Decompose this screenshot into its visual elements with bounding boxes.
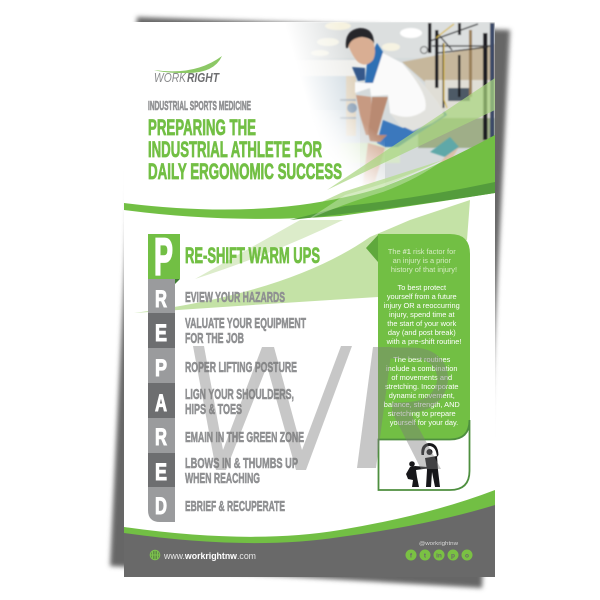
callout text: best routines: balance, strength, AND [384,400,460,409]
checklist text: ROPER LIFTING POSTURE [185,359,297,376]
social icons: f [410,552,413,560]
checklist text [185,243,320,515]
checklist text: WHEN REACHING [185,470,260,487]
callout text: protection advice: injury, spend time at [389,310,455,319]
logo: Work Right: RIGHT [187,71,220,85]
social icons: in [436,552,442,560]
person [344,27,459,184]
callout panel [366,234,470,490]
subtitle: INDUSTRIAL SPORTS MEDICINE [148,99,251,113]
watermark: W R [193,346,443,470]
callout text: protection advice: the start of your work [387,319,457,328]
callout text: risk factor: The #1 risk factor for [388,247,456,256]
checklist text: FOR THE JOB [185,330,244,347]
PREPARED letter column: R [155,424,167,451]
checklist text: RE-SHIFT WARM UPS [185,243,320,268]
checklist text: LBOWS IN & THUMBS UP [185,455,298,472]
PREPARED letter column: E [155,320,167,347]
pale green wedge [195,220,343,279]
callout text: best routines: of movements and [391,373,452,382]
green swoosh band [124,78,495,220]
callout text: best routines: dynamic movement, [389,391,455,400]
light green wedge [134,200,470,313]
PREPARED letter column: E [155,459,167,486]
footer band [124,490,495,577]
PREPARED letter column: D [155,493,167,520]
social icons: o [465,552,469,560]
callout text: best routines: stretching. Incorporate [385,382,459,391]
icon: globe [150,550,160,560]
icon: people stretching [406,443,440,487]
callout text: protection advice: injury OR a reoccurring [384,301,460,310]
photo: worker stretching in gym [298,22,495,186]
checklist text: LIGN YOUR SHOULDERS, [185,386,294,403]
logo: Work Right [154,56,222,82]
checklist text: EBRIEF & RECUPERATE [185,498,285,515]
checklist text: VALUATE YOUR EQUIPMENT [185,315,306,332]
PREPARED letter column [148,228,180,522]
callout text: protection advice: day (and post break) [388,328,456,337]
page drop shadow [110,17,510,588]
checklist text: EMAIN IN THE GREEN ZONE [185,429,304,446]
social icons: p [451,552,455,560]
checklist text: EVIEW YOUR HAZARDS [185,289,285,306]
checklist text: HIPS & TOES [185,401,242,418]
callout text: risk factor: an injury is a prior [393,256,451,265]
logo: Work Right: WORK [154,71,187,85]
title [148,119,342,180]
callout text: best routines: stretching to prepare [388,409,456,418]
website: www.workrightnw.com [163,551,256,562]
PREPARED letter column: P [155,355,167,382]
callout text: protection advice: To best protect [398,283,446,292]
callout text: protection advice: yourself from a future [387,292,457,301]
callout text: best routines: The best routines [393,355,451,364]
callout text: best routines: yourself for your day. [390,418,458,427]
PREPARED letter column: R [155,286,167,313]
PREPARED letter column: P [154,228,173,287]
title: INDUSTRIAL ATHLETE FOR [148,137,322,162]
title: DAILY ERGONOMIC SUCCESS [148,159,342,184]
title: PREPARING THE [148,115,256,140]
social handle: @workrightnw [419,541,459,547]
poster page [124,22,495,577]
callout text: best routines: include a combination [386,364,458,373]
PREPARED letter column: A [155,390,167,417]
social icons: t [424,552,427,560]
callout text: risk factor: history of that injury! [391,265,457,274]
social icons [406,550,472,560]
callout text: protection advice: with a pre-shift routine! [386,337,461,346]
